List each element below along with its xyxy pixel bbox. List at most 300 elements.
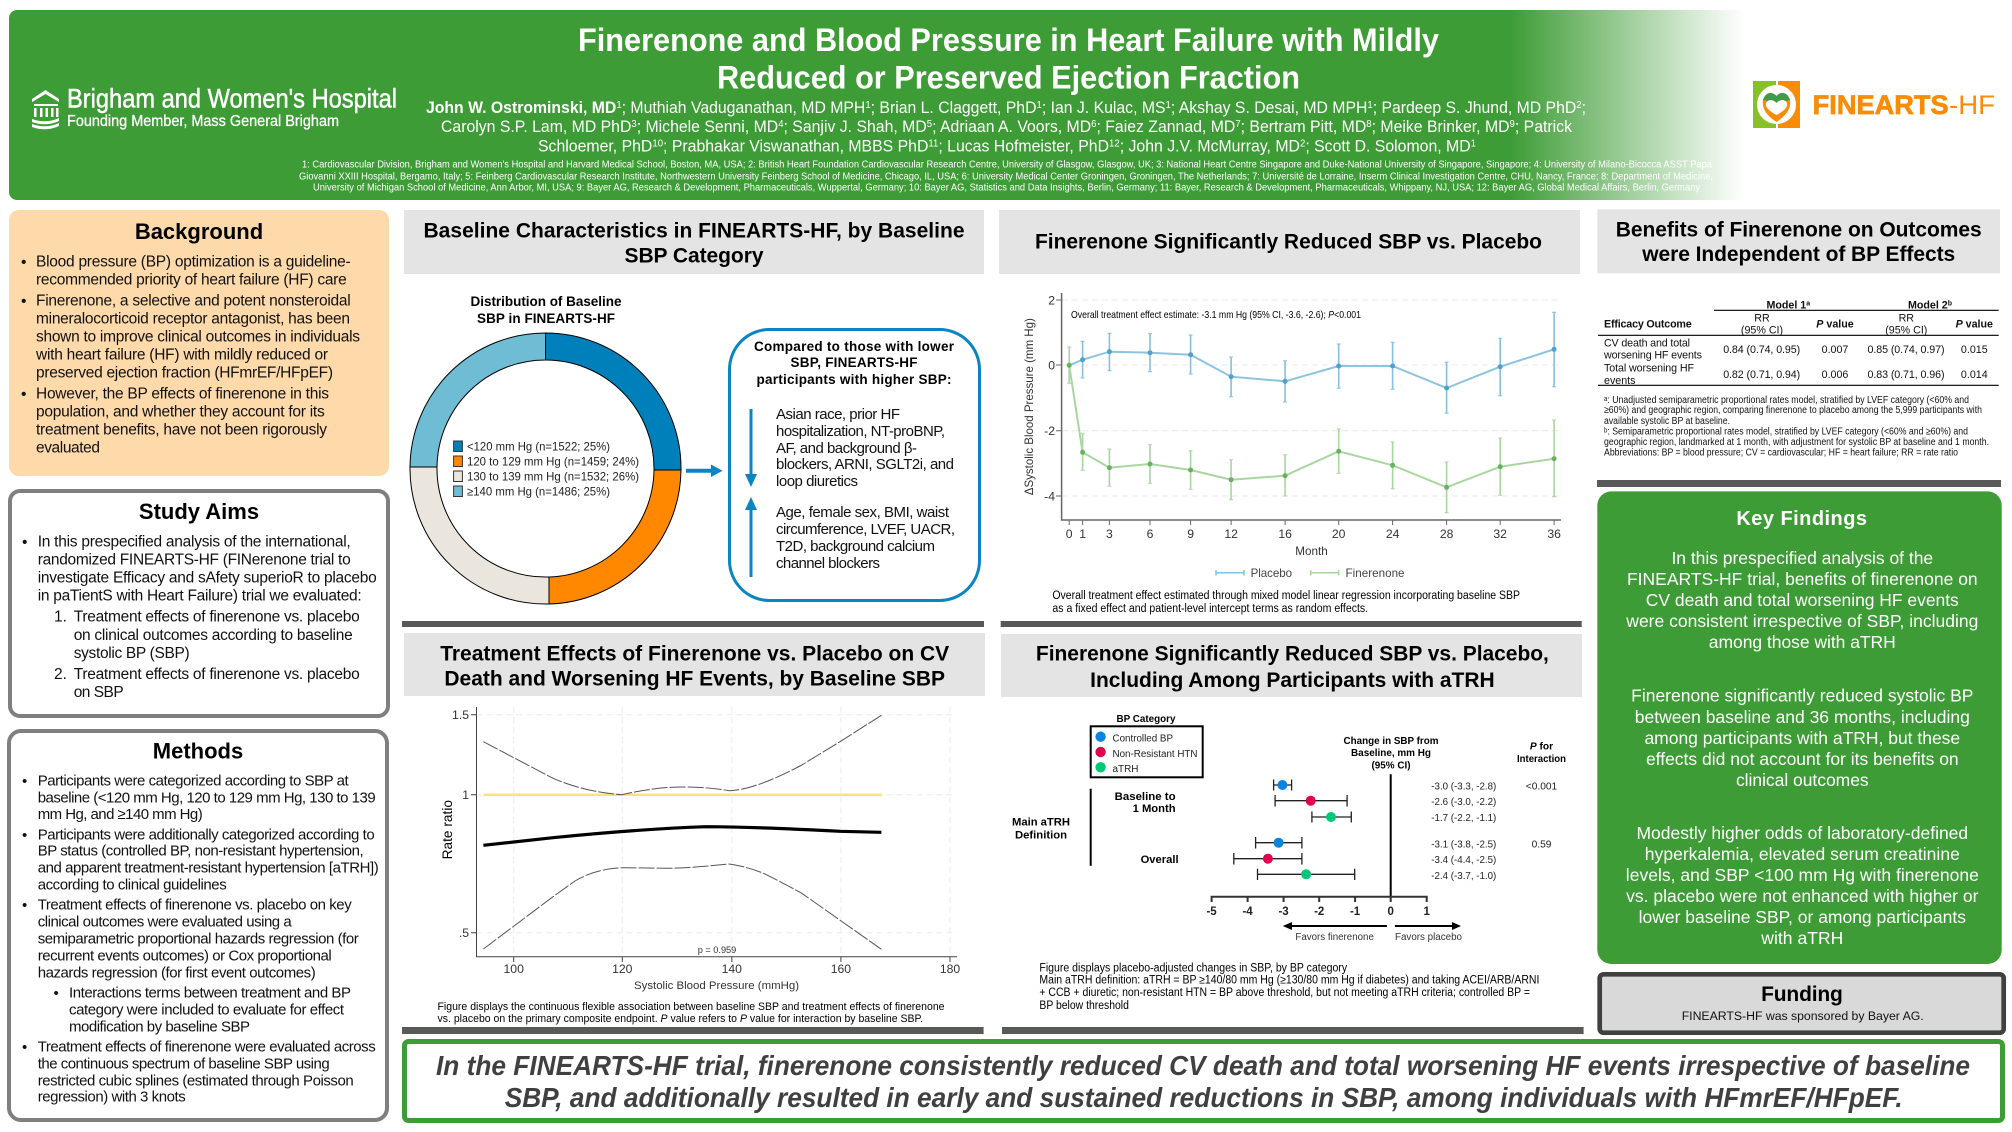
- authors: 3: [631, 119, 637, 130]
- authors: 12: [1109, 138, 1120, 150]
- panel: SBP by BP category: [1001, 634, 1584, 1034]
- background text: [21, 254, 360, 457]
- reference line: [483, 793, 882, 796]
- callout: comparison box: channel blockers: [776, 555, 880, 572]
- table footnotes: a: [1604, 396, 1607, 403]
- panel: SBP over time: [999, 210, 1582, 627]
- methods text: and apparent treatment-resistant hypertension [aTRH]): [38, 860, 379, 877]
- callout: comparison box: circumference, LVEF, UACR,: [776, 521, 955, 538]
- FINEARTS-HF logo: FINEARTS: [1813, 90, 1949, 120]
- forest caption: Figure displays placebo-adjusted changes in SBP, by BP category: [1039, 962, 1347, 974]
- outcomes table: 0.84 (0.74, 0.95): [1723, 344, 1800, 356]
- donut heading: Distribution of Baseline: [470, 294, 622, 309]
- authors: ; Adriaan A. Voors, MD: [932, 118, 1091, 136]
- outcomes table: (95% CI): [1885, 324, 1927, 336]
- estimate values: [1431, 782, 1558, 882]
- axis labels: 1: [462, 788, 469, 802]
- methods text: the continuous spectrum of baseline SBP using: [38, 1056, 330, 1073]
- axis labels: 160: [831, 962, 851, 976]
- background text: evaluated: [36, 440, 100, 457]
- study aims text: in paTientS with Heart Failure) trial we evaluated:: [38, 588, 362, 605]
- forest plot: 0: [1387, 906, 1394, 918]
- methods text: BP status (controlled BP, non-resistant hypertension,: [38, 843, 364, 860]
- axis labels: 0: [1048, 358, 1055, 372]
- row labels: Overall: [1141, 854, 1179, 866]
- authors: John W. Ostrominski, MD: [426, 99, 616, 117]
- chart caption: [1052, 590, 1520, 615]
- outcomes table: b: [1948, 300, 1952, 308]
- outcomes table: Model 2: [1908, 300, 1948, 312]
- callout: comparison box: AF, and background β-: [776, 440, 917, 457]
- axis labels: 100: [504, 962, 524, 976]
- axis labels: .5: [459, 926, 469, 940]
- forest caption: Main aTRH definition: aTRH = BP ≥140/80 mm Hg (≥130/80 mm Hg if diabetes) and taking ACEI/ARB/ARNI: [1039, 974, 1539, 986]
- authors: ; Prabhakar Viswanathan, MBBS PhD: [663, 138, 928, 156]
- methods text: Treatment effects of finerenone vs. placebo on key: [38, 897, 352, 914]
- study aims text: [22, 534, 377, 701]
- outcomes table: RR: [1754, 312, 1770, 324]
- finding 2: Finerenone significantly reduced systolic BP: [1631, 686, 1973, 706]
- finding 1: [1625, 548, 1978, 652]
- axis labels: 3: [1106, 527, 1113, 541]
- background text: Finerenone, a selective and potent nonsteroidal: [36, 293, 351, 310]
- finding 2: clinical outcomes: [1736, 770, 1869, 790]
- finding 1: were consistent irrespective of SBP, including: [1625, 611, 1978, 631]
- funding text: FINEARTS-HF was sponsored by Bayer AG.: [1682, 1009, 1924, 1023]
- finding 1: among those with aTRH: [1709, 632, 1896, 652]
- authors: 4: [778, 119, 784, 130]
- study aims text: In this prespecified analysis of the international,: [38, 534, 351, 551]
- background text: recommended priority of heart failure (HF) care: [36, 272, 347, 289]
- heading: SBP over time: Finerenone Significantly Reduced SBP vs. Placebo: [1035, 230, 1542, 253]
- outcomes table: P value: [1816, 318, 1854, 330]
- series: finerenone: [1067, 347, 1557, 513]
- authors: ; Bertram Pitt, MD: [1241, 118, 1366, 136]
- heading: baseline characteristics: [424, 219, 964, 267]
- arrow: favors finerenone: Favors finerenone: [1295, 932, 1374, 943]
- series: placebo: [1069, 312, 1557, 413]
- axis labels: Systolic Blood Pressure (mmHg): [634, 980, 799, 992]
- outcomes table: worsening HF events: [1603, 350, 1702, 362]
- forest plot: -3: [1278, 906, 1289, 918]
- authors: ; Sanjiv J. Shah, MD: [784, 118, 927, 136]
- axis labels: 180: [940, 962, 960, 976]
- authors: 1: [1036, 100, 1042, 111]
- finding 3: vs. placebo were not enhanced with higher or: [1626, 886, 1979, 906]
- methods text: •: [54, 985, 59, 1002]
- title: Reduced or Preserved Ejection Fraction: [717, 60, 1300, 96]
- outcomes table: 0.006: [1822, 369, 1848, 381]
- background text: •: [21, 386, 26, 403]
- authors: ; Muthiah Vaduganathan, MD MPH: [622, 99, 865, 117]
- authors: ; Patrick: [1515, 118, 1573, 136]
- axis labels: [440, 708, 960, 992]
- callout: comparison box: blockers, ARNI, SGLT2i, and: [776, 456, 954, 473]
- heading: key findings: Key Findings: [1736, 508, 1867, 530]
- conclusion text: In the FINEARTS-HF trial, finerenone consistently reduced CV death and total worsening HF events irrespective of baseline: [436, 1050, 1970, 1081]
- axis labels: 36: [1547, 527, 1561, 541]
- methods text: Participants were categorized according to SBP at: [38, 773, 350, 790]
- callout: comparison box: Asian race, prior HF: [776, 406, 900, 423]
- authors: ; Michele Senni, MD: [637, 118, 778, 136]
- heading: benefits: Benefits of Finerenone on Outcomes: [1616, 218, 1982, 242]
- outcomes table: 0.82 (0.71, 0.94): [1723, 369, 1800, 381]
- outcomes table: events: [1604, 375, 1636, 387]
- heading: benefits: [1616, 218, 1982, 266]
- callout: comparison box: SBP, FINEARTS-HF: [790, 355, 918, 370]
- arrow: down: [745, 409, 757, 487]
- authors: ; Brian L. Claggett, PhD: [871, 99, 1037, 117]
- estimate values: -1.7 (-2.2, -1.1): [1431, 813, 1496, 824]
- lower confidence band: [483, 864, 881, 949]
- panel: background: [9, 210, 389, 476]
- callout: comparison box: [730, 330, 980, 600]
- authors: Carolyn S.P. Lam, MD PhD: [441, 118, 640, 136]
- authors: 1: [616, 100, 622, 111]
- outcomes table: CV death and total: [1604, 338, 1690, 350]
- FINEARTS-HF logo: -HF: [1949, 90, 1995, 120]
- FINEARTS-HF logo: [1753, 81, 1995, 128]
- study aims text: •: [22, 534, 27, 551]
- estimate values: -3.0 (-3.3, -2.8): [1431, 782, 1496, 792]
- chart caption: Overall treatment effect estimated through mixed model linear regression incorporating baseline SBP: [1052, 590, 1520, 602]
- axis labels: -4: [1044, 490, 1055, 504]
- row labels: [1012, 789, 1179, 866]
- chart legend: [1216, 567, 1404, 580]
- outcomes table: RR: [1899, 312, 1914, 324]
- authors: ; John J.V. McMurray, MD: [1120, 138, 1300, 156]
- hospital logo: Brigham and Women's Hospital: [67, 84, 397, 114]
- chart caption: as a fixed effect and patient-level intercept terms as random effects.: [1052, 603, 1368, 615]
- donut chart: [410, 333, 681, 604]
- methods text: baseline (<120 mm Hg, 120 to 129 mm Hg, 130 to 139: [38, 790, 376, 807]
- forest caption: + CCB + diuretic; non-resistant HTN = BP above threshold, but not meeting aTRH criteria; controlled BP =: [1039, 987, 1530, 999]
- panel: treatment effects spline: [402, 633, 985, 1034]
- heading: methods: Methods: [153, 738, 243, 764]
- panel: key findings: [1597, 491, 2002, 964]
- background text: However, the BP effects of finerenone in this: [36, 386, 329, 403]
- study aims text: investigate Efficacy and sAfety superioR to placebo: [38, 570, 377, 587]
- study aims text: Treatment effects of finerenone vs. placebo: [74, 609, 360, 626]
- background text: •: [21, 293, 26, 310]
- estimate values: -2.6 (-3.0, -2.2): [1431, 797, 1496, 808]
- estimate values: -3.1 (-3.8, -2.5): [1431, 840, 1496, 850]
- axis labels: 120: [612, 962, 633, 976]
- hospital logo: Founding Member, Mass General Brigham: [67, 113, 339, 130]
- methods text: •: [22, 773, 27, 790]
- axis labels: Month: [1295, 545, 1328, 558]
- forest caption: [1039, 962, 1539, 1012]
- treatment effect note: Overall treatment effect estimate: -3.1 mm Hg (95% CI, -3.6, -2.6); P<0.001: [1071, 309, 1361, 321]
- outcomes table: 0.007: [1822, 344, 1848, 356]
- outcomes table: 0.014: [1961, 369, 1988, 381]
- background text: mineralocorticoid receptor antagonist, has been: [36, 311, 350, 328]
- methods text: modification by baseline SBP: [69, 1019, 250, 1036]
- axis labels: 16: [1278, 527, 1292, 541]
- arrow: favors placebo: Favors placebo: [1395, 932, 1462, 943]
- line chart: [1022, 293, 1561, 580]
- authors: [426, 99, 1586, 156]
- callout: comparison box: hospitalization, NT-proBNP,: [776, 423, 945, 440]
- methods text: restricted cubic splines (estimated through Poisson: [38, 1073, 354, 1090]
- methods text: •: [22, 827, 27, 844]
- axis labels: 1.5: [452, 708, 469, 722]
- finding 2: between baseline and 36 months, including: [1635, 707, 1970, 727]
- table footnotes: available systolic BP at baseline.: [1604, 416, 1730, 427]
- axis labels: 9: [1187, 527, 1194, 541]
- BP category legend: Controlled BP: [1112, 734, 1173, 744]
- axis labels: 140: [722, 962, 742, 976]
- study aims text: Treatment effects of finerenone vs. placebo: [74, 666, 360, 683]
- heading: treatment effects: [440, 642, 949, 690]
- forest plot: -2: [1314, 906, 1324, 918]
- callout: comparison box: participants with higher SBP:: [756, 372, 952, 387]
- finding 3: levels, and SBP <100 mm Hg with finerenone: [1626, 865, 1979, 885]
- methods text: recurrent events outcomes) or Cox proportional: [38, 948, 332, 965]
- heading: SBP by BP category: [1036, 642, 1549, 692]
- forest caption: BP below threshold: [1039, 1000, 1129, 1012]
- axis labels: 1: [1079, 527, 1086, 541]
- estimate values: -2.4 (-3.7, -1.0): [1431, 871, 1496, 882]
- heading: baseline characteristics: SBP Category: [624, 244, 764, 267]
- background text: preserved ejection fraction (HFmrEF/HFpEF): [36, 365, 333, 382]
- authors: 5: [927, 119, 933, 130]
- finding 2: effects did not account for its benefits on: [1646, 749, 1959, 769]
- axis labels: 6: [1147, 527, 1154, 541]
- methods text: mm Hg, and ≥140 mm Hg): [38, 806, 203, 823]
- authors: 10: [652, 138, 663, 150]
- background text: Blood pressure (BP) optimization is a guideline-: [36, 254, 351, 271]
- heading: study aims: Study Aims: [139, 499, 259, 524]
- study aims text: 2.: [54, 666, 67, 683]
- upper confidence band: [483, 715, 881, 795]
- axis labels: ΔSystolic Blood Pressure (mm Hg): [1022, 318, 1036, 495]
- background text: population, and whether they account for its: [36, 404, 325, 421]
- forest plot: Interaction: [1517, 754, 1566, 765]
- study aims text: 1.: [54, 609, 67, 626]
- forest plot: 1: [1423, 906, 1430, 918]
- point estimates: [1277, 780, 1287, 790]
- table footnotes: Abbreviations: BP = blood pressure; CV = cardiovascular; HF = heart failure; RR = rate ratio: [1604, 448, 1958, 458]
- background text: shown to improve clinical outcomes in individuals: [36, 329, 360, 346]
- authors: Schloemer, PhD: [538, 138, 657, 156]
- forest plot: -4: [1242, 906, 1253, 918]
- BP category legend: Non-Resistant HTN: [1112, 749, 1198, 760]
- BP category legend: [1091, 714, 1203, 777]
- study aims text: on SBP: [74, 684, 124, 701]
- conclusion text: SBP, and additionally resulted in early and sustained reductions in SBP, among individuals with HFmrEF/HFpEF.: [505, 1082, 1903, 1113]
- finding 2: [1631, 686, 1973, 790]
- axis labels: 24: [1386, 527, 1400, 541]
- forest plot: (95% CI): [1372, 760, 1410, 772]
- authors: 2: [1576, 100, 1582, 111]
- donut heading: SBP in FINEARTS-HF: [477, 311, 615, 326]
- table footnotes: [1604, 395, 1989, 458]
- background text: •: [21, 254, 26, 271]
- axis labels: 20: [1332, 527, 1346, 541]
- estimate values: <0.001: [1526, 782, 1558, 792]
- authors: ; Faiez Zannad, MD: [1096, 118, 1235, 136]
- methods text: regression) with 3 knots: [38, 1089, 186, 1106]
- heading: benefits: were Independent of BP Effects: [1641, 243, 1955, 266]
- callout: comparison box: Age, female sex, BMI, waist: [776, 504, 950, 521]
- study aims text: randomized FINEARTS-HF (FINerenone trial to: [38, 552, 351, 569]
- callout: comparison box: loop diuretics: [776, 473, 858, 490]
- finding 1: FINEARTS-HF trial, benefits of finerenone on: [1627, 569, 1978, 589]
- axis labels: [1022, 294, 1561, 558]
- spline caption: vs. placebo on the primary composite endpoint. P value refers to P value for interaction by baseline SBP.: [438, 1013, 923, 1025]
- authors: 11: [928, 138, 939, 150]
- authors: ; Scott D. Solomon, MD: [1305, 138, 1471, 156]
- axis labels: -2: [1044, 424, 1055, 438]
- donut legend: ≥140 mm Hg (n=1486; 25%): [467, 486, 610, 498]
- finding 2: among participants with aTRH, but these: [1644, 728, 1960, 748]
- panel: benefits table: [1597, 209, 2001, 487]
- arrow: favors finerenone: [1283, 922, 1387, 943]
- outcomes table: 0.85 (0.74, 0.97): [1868, 344, 1944, 356]
- BP category legend: BP Category: [1116, 714, 1176, 725]
- table footnotes: : Semiparametric proportional rates model, stratified by LVEF category (<60% and ≥60%) and: [1607, 426, 1968, 438]
- confidence intervals: [1234, 780, 1355, 880]
- row labels: Baseline to: [1115, 791, 1176, 803]
- methods text: category were included to evaluate for effect: [69, 1002, 345, 1019]
- methods text: according to clinical guidelines: [38, 877, 227, 894]
- axis labels: p = 0.959: [698, 945, 736, 955]
- forest plot: -1: [1350, 906, 1361, 918]
- methods text: semiparametric proportional hazards regression (for: [38, 931, 359, 948]
- panel: baseline characteristics: [402, 210, 984, 627]
- heading: SBP by BP category: Including Among Participants with aTRH: [1090, 669, 1495, 692]
- arrow: up: [745, 497, 757, 577]
- finding 3: with aTRH: [1760, 928, 1843, 948]
- methods text: Interactions terms between treatment and BP: [69, 985, 351, 1002]
- donut heading: [470, 294, 622, 326]
- forest plot: -5: [1206, 906, 1217, 918]
- methods text: clinical outcomes were evaluated using a: [38, 914, 292, 931]
- spline chart: [440, 707, 960, 992]
- authors: 2: [1300, 138, 1306, 150]
- authors: ; Lucas Hofmeister, PhD: [938, 138, 1109, 156]
- hospital logo: [32, 84, 397, 130]
- authors: 8: [1366, 119, 1372, 130]
- outcomes table: P value: [1956, 318, 1993, 330]
- authors: ; Ian J. Kulac, MS: [1042, 99, 1166, 117]
- background text: treatment benefits, have not been rigorously: [36, 422, 327, 439]
- arrow: favors placebo: [1395, 922, 1462, 943]
- panel: funding: [1600, 974, 2004, 1033]
- arrow: to comparison box: [686, 464, 723, 477]
- authors: 1: [1471, 138, 1476, 150]
- donut legend: <120 mm Hg (n=1522; 25%): [467, 440, 610, 454]
- heading: SBP by BP category: Finerenone Significantly Reduced SBP vs. Placebo,: [1036, 642, 1549, 666]
- axis labels: 32: [1493, 527, 1507, 541]
- authors: ; Akshay S. Desai, MD MPH: [1171, 99, 1367, 117]
- affiliations: Giovanni XXIII Hospital, Bergamo, Italy; 5: Feinberg Cardiovascular Research Institute, Northwestern University Feinberg School of Medicine, Chicago, IL, USA; 6: University Medical Center Groningen, Groningen, The Netherlands; 7: Université de Lorraine, Inserm Clinical Investigation Centre, CHU, Nancy, France; 8: Department of Medicine,: [299, 172, 1713, 182]
- outcomes table: Efficacy Outcome: [1604, 318, 1692, 330]
- forest plot: Change in SBP from: [1344, 736, 1438, 747]
- donut legend: 120 to 129 mm Hg (n=1459; 24%): [467, 456, 639, 468]
- spline caption: [438, 1001, 944, 1025]
- forest plot: P for: [1530, 742, 1553, 753]
- donut legend: 130 to 139 mm Hg (n=1532; 26%): [467, 470, 639, 484]
- estimate values: 0.59: [1532, 840, 1552, 850]
- outcomes table: Model 1: [1766, 300, 1806, 312]
- BP category legend: aTRH: [1112, 764, 1138, 775]
- authors: 9: [1510, 119, 1515, 130]
- finding 3: lower baseline SBP, or among participants: [1639, 907, 1966, 927]
- finding 3: [1626, 823, 1979, 948]
- panel: conclusion: [404, 1042, 2002, 1120]
- authors: ; Meike Brinker, MD: [1372, 118, 1510, 136]
- chart legend: Placebo: [1251, 567, 1292, 580]
- affiliations: [299, 160, 1713, 194]
- axis labels: 0: [1066, 527, 1073, 541]
- affiliations: University of Michigan School of Medicine, Ann Arbor, MI, USA; 9: Bayer AG, Research & Development, Pharmaceuticals, Wuppertal, Germany; 10: Bayer AG, Statistics and Data Insights, Berlin, Germany; 11: Bayer, Research & Development, Pharmaceuticals, Whippany, NJ, USA; 12: Bayer AG, Global Medical Affairs, Berlin, Germany: [313, 182, 1700, 194]
- authors: 1: [1166, 100, 1171, 111]
- table footnotes: : Unadjusted semiparametric proportional rates model, stratified by LVEF category (<60% and: [1607, 395, 1969, 406]
- header banner: [9, 10, 1744, 200]
- spline caption: Figure displays the continuous flexible association between baseline SBP and treatment effects of finerenone: [438, 1001, 944, 1013]
- axis labels: 2: [1048, 294, 1055, 308]
- finding 3: Modestly higher odds of laboratory-defined: [1636, 823, 1968, 843]
- axis labels: 12: [1224, 527, 1238, 541]
- title: Finerenone and Blood Pressure in Heart Failure with Mildly: [578, 22, 1439, 58]
- methods text: Treatment effects of finerenone were evaluated across: [38, 1039, 376, 1056]
- chart legend: Finerenone: [1346, 567, 1404, 580]
- authors: 1: [1367, 100, 1373, 111]
- row labels: 1 Month: [1133, 803, 1176, 815]
- outcomes table: (95% CI): [1741, 324, 1783, 336]
- title: [578, 22, 1439, 96]
- row labels: Definition: [1015, 830, 1067, 842]
- panel: study aims: [10, 491, 388, 716]
- methods text: [22, 773, 379, 1106]
- callout: comparison box: Compared to those with lower: [754, 339, 955, 354]
- finding 1: In this prespecified analysis of the: [1671, 548, 1933, 568]
- axis labels: Rate ratio: [440, 800, 455, 859]
- axis labels: 28: [1440, 527, 1454, 541]
- affiliations: 1: Cardiovascular Division, Brigham and Women's Hospital and Harvard Medical School, Boston, MA, USA; 2: British Heart Foundation Cardiovascular Research Centre, University of Glasgow, Glasgow, UK; 3: National Heart Centre Singapore and Duke-National University of Singapore, Singapore; 4: University of Milano-Bicocca ASST Papa: [302, 160, 1712, 170]
- authors: ;: [1582, 99, 1586, 117]
- heading: background: Background: [135, 219, 263, 244]
- heading: treatment effects: Death and Worsening HF Events, by Baseline SBP: [444, 668, 945, 690]
- heading: funding: Funding: [1761, 983, 1843, 1006]
- heading: baseline characteristics: Baseline Characteristics in FINEARTS-HF, by Baseline: [424, 219, 964, 242]
- authors: 7: [1235, 119, 1241, 130]
- background text: with heart failure (HF) with mildly reduced or: [35, 347, 328, 364]
- finding 3: hyperkalemia, elevated serum creatinine: [1645, 844, 1960, 864]
- methods text: •: [22, 897, 27, 914]
- outcomes table: Total worsening HF: [1604, 362, 1694, 374]
- row labels: Main aTRH: [1012, 816, 1070, 828]
- heading: treatment effects: Treatment Effects of Finerenone vs. Placebo on CV: [440, 642, 949, 666]
- forest plot: Baseline, mm Hg: [1351, 748, 1431, 759]
- panel: methods: [9, 731, 387, 1120]
- rate ratio curve: [483, 827, 881, 845]
- methods text: Participants were additionally categorized according to: [38, 827, 375, 844]
- outcomes table: 0.015: [1961, 344, 1988, 356]
- forest plot: [1206, 736, 1566, 943]
- estimate values: -3.4 (-4.4, -2.5): [1431, 855, 1496, 866]
- study aims text: systolic BP (SBP): [74, 645, 190, 662]
- callout: comparison box: T2D, background calcium: [776, 538, 935, 555]
- outcomes table: a: [1806, 300, 1810, 308]
- methods text: hazards regression (for first event outcomes): [38, 965, 316, 982]
- authors: ; Pardeep S. Jhund, MD PhD: [1373, 99, 1576, 117]
- outcomes table: 0.83 (0.71, 0.96): [1868, 369, 1944, 381]
- study aims text: on clinical outcomes according to baseline: [74, 627, 353, 644]
- methods text: •: [22, 1039, 27, 1056]
